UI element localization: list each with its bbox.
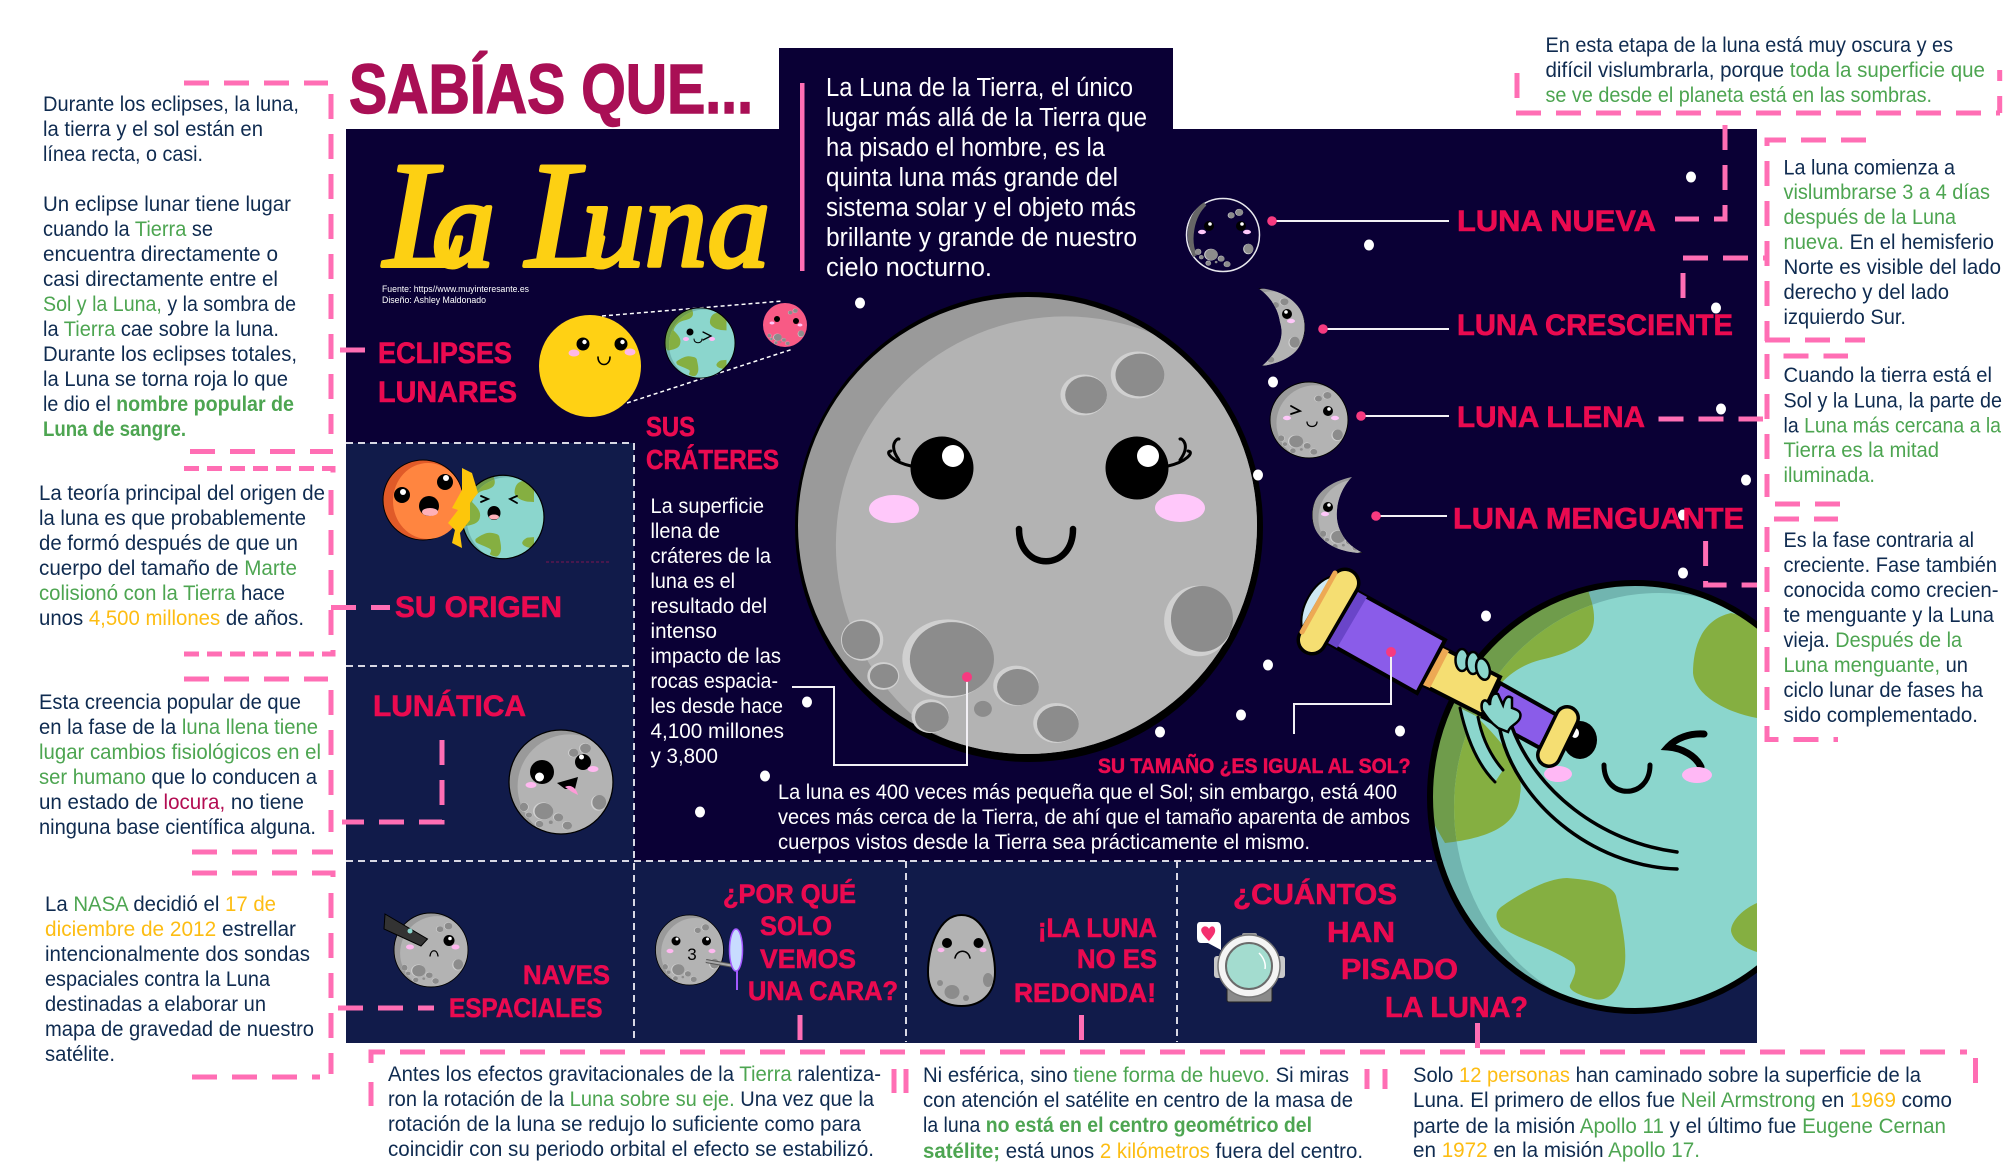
moon phase line: nueva [1267,216,1449,226]
bottom text 1: rotation: rotación de la luna se redujo lo suficiente como para [388,1112,861,1136]
right text 2: full moon: iluminada. [1784,463,1875,487]
bottom text 3: astronauts: en 1972 en la misión Apollo 17. [1413,1138,1700,1162]
pink dashed frames and connectors [184,70,2000,1106]
heading: sus cráteres: CRÁTERES [646,444,779,475]
right text 1: crescent: Norte es visible del lado [1784,255,2001,279]
top intro text: brillante y grande de nuestro [826,224,1137,252]
panel dashed dividers [346,443,1432,1042]
heading: naves espaciales: NAVES [523,960,610,990]
top intro text: La Luna de la Tierra, el único [826,74,1133,102]
moon phase: waning [1312,477,1362,553]
top right text: new moon: difícil vislumbrarla, porque toda la superficie que [1546,58,1985,82]
right text 2: full moon: Tierra es la mitad [1784,438,1939,462]
right text 3: waning: Luna menguante, un [1784,653,1968,677]
left text 3: lunatic: lugar cambios fisiológicos en el [39,740,321,764]
left text 2: origin: La teoría principal del origen de [39,481,325,505]
craters text: rocas espacia- [650,669,778,693]
right text 1: crescent: nueva. En el hemisferio [1784,230,1994,254]
bottom text 1: rotation: ron la rotación de la Luna sobre su eje. Una vez que la [388,1087,874,1111]
left text 2: origin: unos 4,500 millones de años. [39,606,304,630]
source credits: Fuente: https//www.muyinteresante.es [382,284,529,295]
telescope callout line [1294,647,1396,734]
heading: naves espaciales [449,960,610,1023]
top intro text: ha pisado el hombre, es la [826,134,1106,162]
left text 1: eclipses: la Tierra cae sobre la luna. [43,317,279,341]
left text 1: eclipses: la Luna se torna roja lo que [43,367,288,391]
bottom text 3: astronauts: Solo 12 personas han caminado sobre la superficie de la [1413,1063,1921,1087]
bottom text 3: astronauts: Luna. El primero de ellos fue Neil Armstrong en 1969 como [1413,1088,1952,1112]
intro accent bar [800,83,804,271]
bottom text 3: astronauts [1413,1063,1952,1162]
craters text: 4,100 millones [650,719,784,743]
moon phase: crescent [1258,288,1305,366]
right text 1: crescent: después de la Luna [1784,205,1956,229]
right text 2: full moon: Cuando la tierra está el [1784,363,1992,387]
heading: cuántos han pisado la luna: ¿CUÁNTOS [1233,879,1397,911]
right text 1: crescent: derecho y del lado [1784,280,1949,304]
bottom text 2: egg shape: la luna no está en el centro geométrico del [923,1113,1312,1137]
left text 1: eclipses [43,92,299,441]
heading: su tamaño: SU TAMAÑO ¿ES IGUAL AL SOL? [1098,755,1410,778]
left text 4: NASA: La NASA decidió el 17 de [45,892,276,916]
heading: naves espaciales: ESPACIALES [449,993,602,1023]
source credits: Diseño: Ashley Maldonado [382,295,486,306]
moon phase line: creciente [1318,324,1449,334]
left text 4: NASA: intencionalmente dos sondas [45,942,310,966]
bottom text 1: rotation: Antes los efectos gravitacionales de la Tierra ralentiza- [388,1062,881,1086]
heading: luna creciente: LUNA CRESCIENTE [1457,309,1733,342]
heading: cuántos han pisado la luna: LA LUNA? [1385,992,1528,1024]
right text 1: crescent: La luna comienza a [1784,156,1955,180]
heading: eclipses lunares [378,337,517,409]
heading: luna llena: LUNA LLENA [1457,401,1645,434]
craters text: intenso [650,619,717,643]
left text 1: eclipses: Sol y la Luna, y la sombra de [43,292,296,316]
moon with mirror [656,915,742,990]
size text: La luna es 400 veces más pequeña que el Sol; sin embargo, está 400 [778,780,1397,804]
left text 1: eclipses: línea recta, o casi. [43,142,203,166]
top right text: new moon: se ve desde el planeta está en las sombras. [1546,83,1932,107]
small earth with face [663,306,737,381]
left text 1: eclipses: Luna de sangre. [43,417,186,441]
craters text: y 3,800 [650,744,718,768]
left text 1: eclipses: Durante los eclipses, la luna, [43,92,299,116]
telescope [1301,573,1567,755]
dark panel background [346,48,1757,1043]
right text 3: waning: Es la fase contraria al [1784,528,1974,552]
left text 1: eclipses: la tierra y el sol están en [43,117,263,141]
small pink moon [763,303,807,347]
heading: luna menguante: LUNA MENGUANTE [1453,502,1744,536]
title: La Luna: una [582,155,770,294]
moon with spyglass [384,913,474,990]
title: La Luna: a [432,155,495,294]
bottom text 3: astronauts: parte de la misión Apollo 11 y el último fue Eugene Cernan [1413,1114,1946,1138]
left text 4: NASA: diciembre de 2012 estrellar [45,917,296,941]
heading: cuántos han pisado la luna: PISADO [1341,954,1458,986]
left text 3: lunatic: Esta creencia popular de que [39,690,301,714]
left text 1: eclipses: encuentra directamente o [43,242,278,266]
heading: cuántos han pisado la luna: HAN [1327,917,1395,949]
left text 3: lunatic: ser humano que lo conducen a [39,765,317,789]
right text 3: waning: sido complementado. [1784,703,1978,727]
moon phase: new moon [1186,198,1260,272]
small dashes under origin illustration [546,561,610,563]
left text 2: origin [39,481,325,630]
title: La Luna: L [382,131,469,299]
right text 2: full moon [1784,363,2002,487]
heading: sus cráteres [646,411,779,475]
heading: por qué solo vemos una cara: VEMOS [760,944,856,974]
heading: por qué solo vemos una cara [723,879,898,1006]
top intro text: quinta luna más grande del [826,164,1118,192]
heading: la luna no es redonda [1014,913,1157,1008]
left text 3: lunatic [39,690,321,839]
heading: eclipses lunares: ECLIPSES [378,337,512,370]
small sun with face [539,315,641,417]
earth character with telescope [1296,568,1757,1014]
heading: lunática: LUNÁTICA [373,689,526,723]
right text 1: crescent [1784,156,2001,329]
left text 4: NASA: satélite. [45,1042,115,1066]
moon phase line: menguante [1371,511,1447,521]
left text 4: NASA [45,892,314,1066]
heading: eclipses lunares: LUNARES [378,376,517,409]
craters text: resultado del [650,594,767,618]
title: Sabías que: SABÍAS QUE... [349,50,753,128]
right text 1: crescent: izquierdo Sur. [1784,305,1906,329]
left text 4: NASA: destinadas a elaborar un [45,992,266,1016]
left text 1: eclipses: Un eclipse lunar tiene lugar [43,192,291,216]
size text [778,780,1410,854]
stars [695,172,1751,818]
left text 1: eclipses: casi directamente entre el [43,267,278,291]
craters text: les desde hace [650,694,783,718]
left text 1: eclipses: Durante los eclipses totales, [43,342,297,366]
lunatic moon character [509,730,622,838]
bottom text 2: egg shape [923,1063,1363,1163]
size text: cuerpos vistos desde la Tierra sea prácticamente el mismo. [778,830,1310,854]
left text 2: origin: la luna es que probablemente [39,506,306,530]
top right text: new moon [1546,33,1985,107]
egg shaped moon [928,915,995,1006]
bottom text 2: egg shape: con atención el satélite en centro de la masa de [923,1088,1353,1112]
heading: la luna no es redonda: REDONDA! [1014,978,1156,1008]
heading: sus cráteres: SUS [646,411,695,442]
right text 3: waning: te menguante y la Luna [1784,603,1994,627]
heading: la luna no es redonda: ¡LA LUNA [1038,913,1157,943]
left text 3: lunatic: en la fase de la luna llena tiene [39,715,318,739]
craters text: llena de [650,519,720,543]
left text 2: origin: cuerpo del tamaño de Marte [39,556,297,580]
craters text [650,494,784,768]
left text 4: NASA: mapa de gravedad de nuestro [45,1017,314,1041]
moon phase: full moon [1270,382,1354,461]
astronaut helmet and heart bubble [1197,922,1285,1002]
heading: luna nueva: LUNA NUEVA [1457,205,1656,238]
right text 1: crescent: vislumbrarse 3 a 4 días [1784,180,1990,204]
top right text: new moon: En esta etapa de la luna está muy oscura y es [1546,33,1953,57]
left text 2: origin: colisionó con la Tierra hace [39,581,285,605]
source credits [382,284,529,306]
craters text: impacto de las [650,644,781,668]
craters text: La superficie [650,494,764,518]
bottom text 2: egg shape: satélite; está unos 2 kilómetros fuera del centro. [923,1139,1363,1163]
heading: la luna no es redonda: NO ES [1077,944,1157,974]
title: La Luna: L [524,131,611,299]
top intro text: lugar más allá de la Tierra que [826,104,1147,132]
left text 3: lunatic: ninguna base científica alguna. [39,815,316,839]
right text 3: waning: ciclo lunar de fases ha [1784,678,1983,702]
right text 3: waning: conocida como crecien- [1784,578,1998,602]
bottom text 2: egg shape: Ni esférica, sino tiene forma de huevo. Si miras [923,1063,1349,1087]
star on moon rim [1253,470,1263,480]
left text 1: eclipses: cuando la Tierra se [43,217,213,241]
craters text: cráteres de la [650,544,771,568]
crater callout line [792,672,972,765]
heading: por qué solo vemos una cara: UNA CARA? [748,976,898,1006]
earth arms and hands [1456,649,1677,869]
heading: por qué solo vemos una cara: SOLO [760,911,832,941]
top intro text [826,74,1147,282]
heading: cuántos han pisado la luna [1233,879,1528,1024]
top intro text: sistema solar y el objeto más [826,194,1136,222]
lighter navy panels [346,443,1757,1043]
heading: su origen: SU ORIGEN [395,591,562,624]
earth face [1544,721,1712,791]
perspective dashed lines [602,301,793,403]
top intro text: cielo nocturno. [826,254,992,282]
main moon character [795,292,1295,773]
moon phase line: llena [1356,411,1449,421]
left text 3: lunatic: un estado de locura, no tiene [39,790,304,814]
bottom text 1: rotation: coincidir con su periodo orbital el efecto se estabilizó. [388,1137,874,1161]
moon with mirror: 3 [687,945,697,964]
bottom text 1: rotation [388,1062,881,1161]
craters text: luna es el [650,569,735,593]
origin illustration: collision [383,460,546,562]
left text 1: eclipses: le dio el nombre popular de [43,392,294,416]
left text 2: origin: de formó después de que un [39,531,298,555]
left text 4: NASA: espaciales contra la Luna [45,967,270,991]
heading: por qué solo vemos una cara: ¿POR QUÉ [723,879,856,909]
right text 3: waning: creciente. Fase también [1784,553,1997,577]
right text 3: waning [1784,528,1998,727]
right text 3: waning: vieja. Después de la [1784,628,1962,652]
size text: veces más cerca de la Tierra, de ahí que el tamaño aparenta de ambos [778,805,1410,829]
